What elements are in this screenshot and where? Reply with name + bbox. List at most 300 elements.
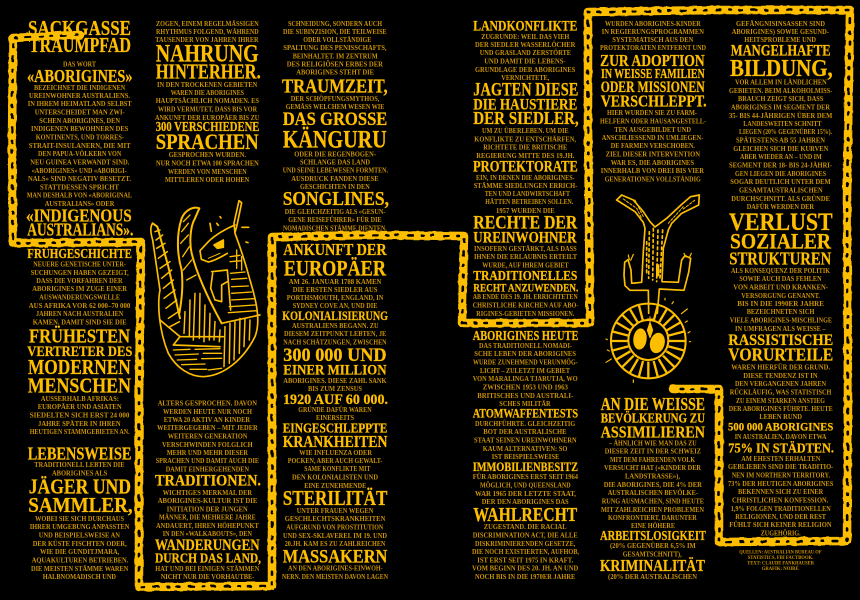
text block: Sprachen verschwinden: ETWA 20 AKTIV AN KINDER (164, 415, 251, 424)
heading: Aborigines: «ABORIGINES» (27, 66, 132, 86)
text: Erlaubnis: WURDE, AUF IHREM GEBIET (482, 260, 569, 270)
text block: Beschneidung: BEINHALTET. IM ZENTRUM (293, 52, 378, 60)
heading: Verlust sozialer Strukturen: SOZIALER (730, 228, 832, 253)
heading: traditionelles Recht anzuwenden: TRADITIONELLES (473, 269, 577, 284)
heading: jagten diese die Haustiere: DIE HAUSTIERE (473, 96, 577, 113)
panel: Bildung (728, 19, 834, 538)
text block: Vorfahren: DASS DIE VORFAHREN DER (36, 276, 123, 285)
heading: an die weisse Bevölkerung: AN DIE WEISSE (601, 394, 705, 414)
text block: ausserhalb Afrikas: EUROPÄER UND ASIATEN (38, 402, 122, 411)
text block: Bezeichnung: KONTINENTS, UND TORRES- (36, 132, 124, 142)
text block: Geschlechtskrankheiten: 20.JH. KAM ES ZU ZAHLREICHEN (285, 539, 386, 548)
text block: Farmhelfer: WAR ES, DIE ABORIGINES (611, 158, 694, 167)
text block: Vorfahren: JAHREN NACH AUSTRALIEN (36, 309, 124, 318)
text block: Missionen: AB ENDE DES 19. JH. ERRICHTETEN (473, 292, 578, 301)
text block: Tendenz: LEBEN RUND (759, 412, 802, 421)
text block: Northern Territory und Religion (728, 454, 834, 538)
text block: Alternativen: IST BEISPIELSWEISE (492, 452, 559, 461)
text block: Influenza und Pocken: DEN KOLONIALISTEN UND (292, 472, 378, 482)
heading: Traumpfad: TRAUMPFAD (29, 33, 131, 57)
text block: Sprachen verschwinden (156, 398, 259, 474)
heading: 300 verschiedene Sprachen (156, 119, 259, 154)
text block: Beschneidung (283, 19, 387, 76)
text: Reiseführer: GENE REISEFÜHRER» FÜR DIE (288, 215, 382, 224)
source credits: QUELLEN: AUSTRALIAN BUREAU OF (739, 550, 822, 556)
heading: Atomwaffentests: ATOMWAFFENTESTS (473, 406, 578, 421)
text: Gesundheitsprobleme: ABORIGINES) SOWIE GESUND- (732, 27, 829, 36)
text block: Schweiz (601, 438, 705, 530)
text block: Regierungsprogramme: IN REGIERUNGSPROGRAMMEN (602, 27, 705, 36)
text block: Alkoholmissbrauch: VOR ALLEM IN LÄNDLICHEN (735, 78, 827, 86)
text block: Queensland: FÜR ABORIGINES ERST SEIT 1964 (473, 472, 578, 481)
heading: Rechte der Ureinwohner (473, 213, 578, 247)
text block: Wasserlöcher: UND GRASLAND ZERSTÖRTE (480, 48, 571, 57)
text block: Farmhelfer: ZIEL DIESER INTERVENTION (606, 150, 701, 158)
heading: Früheste Vertreter: MENSCHEN (28, 374, 131, 398)
text block: Maralinga: WURDE ZUNEHMEND VERUNMÖG- (473, 358, 578, 366)
text block: Alkoholmissbrauch (729, 78, 833, 211)
heading: Nahrung hinterher (156, 41, 261, 83)
text block: Alternativen: BOT DER AUSTRALISCHE (483, 427, 567, 436)
text: Reiseführer: DIE GLEICHZEITIG ALS «GESUN- (285, 207, 386, 216)
text block: Alternativen: DURCHFÜHRTE. GLEICHZEITIG (475, 419, 576, 428)
text block: Konflikte entschärfen: KONFLIKTE ZU ENTSCHÄRFEN, (474, 134, 576, 144)
text block: Initiation: ANDAUERT, IHREN HÖHEPUNKT (156, 521, 259, 530)
text block: 1788: SYDNEY COVE AN, UND DIE (293, 301, 377, 310)
text block: Racial Discrimination Act: VOM BEGINN DES 20. JH. AN UND (472, 564, 578, 572)
text block: Alkoholmissbrauch: 35- BIS 44-JÄHRIGEN ÜBER DEM (729, 111, 832, 120)
text block: trockene Gebiete: IN DEN TROCKENEN GEBIETEN (157, 80, 258, 89)
text block: Regierungsprogramme: WURDEN ABORIGINES-KINDER (605, 19, 701, 28)
text block: Konflikte entschärfen (474, 126, 576, 160)
text block: Lebensraum: DIE MEISTEN STÄMME WAREN (31, 564, 129, 573)
text block: Maralinga (473, 341, 578, 408)
text block: Konflikte entschärfen: RICHTETE DIE BRITISCHE (483, 142, 567, 152)
heading: Wahlrecht: WAHLRECHT (473, 504, 578, 526)
text block: Maralinga: BRITISCHES UND AUSTRALI- (477, 391, 574, 400)
text block: Bezeichnung: INDIGENEN BEWOHNERN DES (31, 124, 128, 133)
text block: Initiation: ABORIGINES-KULTUR IST DIE (158, 496, 257, 505)
text block: Maralinga: DAS TRADITIONELL NOMADI- (479, 341, 572, 350)
heading: Kriminalität: KRIMINALITÄT (600, 556, 706, 575)
text block: Konsequenz der Politik: VON ARBEIT UND KRANKEN- (733, 282, 828, 292)
heading: Jäger und Sammler (28, 475, 133, 517)
icon: figure with circle (606, 195, 699, 382)
text block: trockene Gebiete: WIRD VERMUTET, DASS BIS VOR (158, 104, 258, 114)
text block: Zeitpunkt (283, 321, 387, 346)
heading: an die weisse Bevölkerung: BEVÖLKERUNG ZU (601, 410, 705, 425)
text block: Konsequenz der Politik: ALS KONSEQUENZ DER POLITIK (731, 266, 830, 275)
heading: Frühgeschichte: FRÜHGESCHICHTE (27, 245, 132, 262)
text block: Initiation: IN DEN «WALKABOUTS», DEN (163, 529, 253, 538)
heading: Verlust sozialer Strukturen: VERLUST (729, 209, 833, 236)
text block: Maralinga: SCHE LEBEN DER ABORIGINES (474, 349, 576, 358)
text block: Vorfahren: AUSWANDERUNGSWELLE (39, 292, 120, 302)
text block: Bezeichnung: STATTDESSEN SPRICHT (40, 182, 119, 192)
text block: Tendenz: WAREN HIERFÜR DER GRUND. (731, 362, 830, 372)
text block: Tendenz: DER ABORIGINES FÜHRTE. HEUTE (729, 404, 833, 413)
heading: Wanderungen durch das Land: DURCH DAS LAND, (155, 550, 261, 565)
text block: Schweiz: MIT DEM FAHRENDEN VOLK (610, 455, 695, 464)
text block: Farmhelfer: INNERHALB VON DREI BIS VIER (601, 166, 705, 175)
text block: Sprachen verschwinden: VERSCHWINDEN FOLGLICH (162, 440, 253, 449)
text: traditionell: TRADITIONELL LEBTEN DIE (34, 460, 125, 469)
text block: Farmhelfer: DE FARMEN VERSCHOBEN. (611, 141, 695, 150)
text block: 1788: DIE ERSTEN SIEDLER AUS (293, 285, 377, 294)
heading: 300 verschiedene Sprachen: SPRACHEN (156, 129, 259, 154)
text block: Lebensraum (30, 514, 130, 581)
text block: Regenbogenschlange (283, 150, 388, 191)
text: Erlaubnis (474, 244, 577, 270)
text: das Wort: DAS WORT (63, 60, 96, 68)
text block: Racial Discrimination Act: ZUGESTAND. DIE RACIAL (484, 522, 567, 531)
heading: Massakern: MASSAKERN (283, 547, 388, 567)
text block: Missionen: RIGINES-GEBIETEN MISSIONEN. (476, 309, 574, 318)
text block: ausserhalb Afrikas: JAHRE SPÄTER IN IHREN (38, 419, 121, 428)
text block: noch 100 Sprachen: GESPROCHEN WURDEN. (169, 150, 246, 159)
text block: Alkoholmissbrauch: LIEGEN (20% GEGENÜBER 15%). (739, 127, 832, 136)
heading: Kolonialisierung: KOLONIALISIERUNG (282, 308, 388, 323)
text: Schöpfungsmythos (286, 94, 384, 111)
panel: Landkonflikte (473, 19, 579, 318)
text block: Regierungsprogramme: PROTEKTORATEN ENTFERNT UND (600, 43, 706, 52)
text block: 1788: AM 26. JANUAR 1788 KAMEN (289, 277, 382, 286)
text block: Nomaden: TAUSENDER VON JAHREN IHRER (155, 35, 259, 44)
text block: Sprachen verschwinden: DAMIT EINHERGEHENDEN (166, 464, 250, 474)
text block: Maralinga: SCHES MILITÄR (499, 399, 551, 408)
text block: Vorfahren: NEUERE GENETISCHE UNTER- (33, 260, 126, 268)
text block: Konsequenz der Politik: IN UMFRAGEN ALS WEISSE – (735, 324, 826, 333)
text block: Alkoholmissbrauch: SEGMENT DER 18- BIS 24-JÄHRI- (729, 160, 832, 170)
text block: Alkoholmissbrauch: GLEICHEN SICH DIE KURVEN (733, 144, 829, 153)
text block: noch 100 Sprachen (156, 150, 259, 184)
text block: Racial Discrimination Act: DISCRIMINATION ACT, DIE ALLE (473, 530, 578, 540)
text block: Wasserlöcher: ZUGRUNDE: WEIL DAS VIEH (481, 32, 570, 41)
text block: Alkoholmissbrauch: DAFÜR WERDEN DER (747, 202, 815, 211)
text block: Bezeichnung: SCHEN ABORIGINES, DEN (39, 116, 121, 125)
text block: Siedlungen: STÄMME SIEDLUNGEN ERRICH- (474, 181, 578, 190)
text block: Sprachen verschwinden: MEHR UND MEHR DIESER (167, 448, 249, 457)
text: Zahl sank (283, 376, 387, 393)
text block: Wasserlöcher: GRUNDLAGE DER ABORIGINES (475, 65, 575, 74)
text block: Regenbogenschlange: UND SEINE LEBEWESEN FORMTEN. (283, 166, 388, 174)
text block: Missionen (473, 292, 579, 318)
text block: Schweiz: RUNG AUSMACHEN, SIND HEUTE (602, 496, 704, 506)
text block: Beschneidung: SPALTUNG DES PENISSCHAFTS, (283, 43, 387, 52)
panel: Lebensweise (28, 443, 133, 581)
heading: eingeschleppte Krankheiten (283, 422, 388, 451)
text block: Wasserlöcher: UND DAMIT DIE LEBENS- (484, 56, 566, 66)
text block: noch 100 Sprachen: WERDEN VON MENSCHEN (168, 167, 247, 176)
text block: Vorfahren: KAMEN. DAMIT SIND SIE DIE (33, 318, 127, 326)
heading: Früheste Vertreter: FRÜHESTEN (29, 325, 130, 348)
heading: Das grosse Känguru: DAS GROSSE (283, 109, 387, 130)
text block: Geschlechtskrankheiten: GESCHLECHTSKRANKHEITEN (285, 514, 386, 523)
text block: Bezeichnung: BEZEICHNET DIE INDIGENEN (34, 83, 126, 92)
panel: Sprachen (155, 19, 261, 184)
text block: Konflikte entschärfen: UM ZU ÜBERLEBEN. UM DIE (482, 126, 569, 135)
panel: Assimilieren (600, 394, 706, 581)
text block: Racial Discrimination Act (472, 522, 579, 581)
text: Gesundheitsprobleme (732, 19, 829, 44)
text block: Sprachen verschwinden: WEITEREN GENERATION (168, 432, 248, 440)
text block: Vorfahren: SUCHUNGEN HABEN GEZEIGT, (31, 268, 129, 277)
text block: Beschneidung: ABORIGINES STEHT DIE (296, 68, 374, 76)
text block: Sprachen verschwinden: WEITERGEGEBEN – MIT JEDER (157, 423, 258, 432)
text block: Vorhautbeschneidung: NICHT NUR DIE VORHAUTBE- (161, 572, 255, 581)
text block: Sprachen verschwinden: WERDEN HEUTE NUR NOCH (163, 407, 252, 416)
text block: Northern Territory und Religion: RELIGIONEN, UND DER REST (735, 512, 826, 521)
panel: Frühgeschichte (27, 245, 132, 436)
text block: ausserhalb Afrikas: SIEDELTEN SICH ERST 24 000 (30, 410, 130, 420)
text block: noch 100 Sprachen: NUR NOCH ETWA 100 SPRACHEN (156, 158, 259, 168)
text block: Tendenz: DEN VERGANGENEN JAHREN (735, 379, 827, 388)
text block: Zeitpunkt: AUSTRALIENS BEGANN. ZU (292, 321, 379, 330)
text: Einwohner: NERN. DEN MEISTEN DAVON LAGEN (282, 572, 389, 581)
text block: Lebensraum: HALBNOMADISCH UND (43, 572, 116, 581)
heading: Früheste Vertreter (27, 325, 132, 398)
heading: Sterilität: STERILITÄT (283, 486, 387, 510)
text block: Regierungsprogramme (600, 19, 706, 52)
text block: noch 100 Sprachen: MITTLEREN ODER HOHEN (165, 175, 250, 184)
text block: Initiation: WICHTIGES MERKMAL DER (163, 488, 253, 497)
text block: Racial Discrimination Act: IST ERST SEIT 1975 IN KRAFT. (477, 556, 573, 564)
text block: Lebensraum: WIE DIE GUNDITJMARA, (40, 547, 119, 556)
text block: Farmhelfer: HELFERN ODER HAUSANGESTELL- (600, 116, 706, 126)
source credits: TEXT: CLAUDE FANKHAUSER (747, 562, 814, 566)
text block: Maralinga: VON MARALINGA TJARUTJA, WO (473, 374, 578, 383)
panel: Adoption (600, 19, 707, 183)
text: 20 Prozent: GESAMTSCHNITT), (623, 550, 682, 558)
heading: Traumzeit: TRAUMZEIT, (282, 76, 388, 97)
text block: Queensland: MÖGLICH, UND QUEENSLAND (480, 480, 571, 490)
heading: Indigenous Australians (26, 206, 133, 240)
panel: Traditionen (155, 398, 261, 581)
text block: Farmhelfer: HIER WURDEN SIE ZU FARM- (607, 108, 697, 117)
text block: Bezeichnung: AUSTRALIANS» ODER (45, 199, 115, 208)
heading: zur Adoption: ODER MISSIONEN (601, 79, 705, 96)
text block: Queensland (473, 472, 578, 506)
text block: trockene Gebiete (155, 80, 260, 122)
text: Zahl sank: ABORIGINES. DIESE ZAHL SANK (283, 376, 387, 385)
text block: Alternativen (474, 419, 577, 461)
text block: Geschlechtskrankheiten: UND SEX-SKLAVEREI. IM 19. UND (283, 531, 387, 540)
text block: Maralinga: ZWISCHEN 1953 UND 1963 (483, 382, 568, 392)
heading: mangelhafte Bildung (730, 43, 833, 82)
text block: Farmhelfer: ANSCHLIESSEND IN UMLIEGEN- (602, 133, 704, 142)
text block: Lebensraum: IHRER UMGEBUNG ANPASSTEN (30, 522, 130, 531)
text block: Geschlechtskrankheiten: AUFGRUND VON PROSTITUTION (286, 522, 384, 532)
text block: Bezeichnung: NEU GUINEA VERWANDT SIND. (30, 157, 129, 166)
text block: Queensland: WAR 1965 DER LETZTE STAAT, (475, 489, 576, 498)
text block: Alternativen: STAAT SEINEN UREINWOHNERN (474, 436, 577, 444)
text: Gründe: GRÜNDE DAFÜR WAREN (298, 405, 372, 414)
text block: Influenza und Pocken: POCKEN, ABER AUCH GEWALT- (288, 456, 383, 465)
text block: Nomaden: RHYTHMUS FOLGEND, WÄHREND (156, 27, 259, 36)
text block: Maralinga: LICHT – ZULETZT IM GEBIET (480, 366, 570, 375)
text block: Racial Discrimination Act: DISKRIMINIERENDEN GESETZE, (475, 539, 575, 548)
text block: Konflikte entschärfen: REGIERUNG MITTE DES 19.JH. (476, 151, 574, 160)
text block: Queensland: DER DEN ABORIGINES DAS (482, 497, 569, 506)
text: Reiseführer (283, 207, 387, 232)
text block: Geschlechtskrankheiten: UNTER FRAUEN WEGEN (297, 506, 374, 515)
text block: Alkoholmissbrauch: ABORIGINES IM SEGMENT DER (731, 102, 831, 112)
text block: Northern Territory und Religion: 73% DER HEUTIGEN ABORIGINES (728, 479, 833, 488)
text block: Siedlungen: EIN, IN DENEN DIE ABORIGINES- (476, 173, 575, 182)
heading: Aborigines heute: ABORIGINES HEUTE (473, 329, 578, 344)
text block: Bezeichnung: UREINWOHNER AUSTRALIENS. (29, 91, 130, 100)
text: Zahl sank: BIS ZUM ZENSUS (308, 384, 362, 393)
heading: traditionelles Recht anzuwenden: RECHT ANZUWENDEN. (473, 281, 578, 295)
text block: Siedlungen: HÄTTEN BETREIBEN SOLLEN. (485, 197, 573, 206)
heading: traditionelles Recht anzuwenden (473, 269, 578, 295)
text block: Konsequenz der Politik: BEZEICHNETEN SICH (747, 307, 815, 316)
text block: Influenza und Pocken: SAME KONFLIKTE MIT (304, 464, 370, 473)
heading: Songlines: SONGLINES, (283, 189, 389, 210)
heading: Wanderungen durch das Land: WANDERUNGEN (155, 537, 260, 554)
text block: ausserhalb Afrikas (30, 394, 130, 436)
text block: Alkoholmissbrauch: GEN LIEGEN DIE ABORIGINES (735, 169, 826, 178)
heading: Arbeitslosigkeit: ARBEITSLOSIGKEIT (600, 528, 706, 543)
heading: 300 000 und einer Million (283, 346, 387, 378)
text: 20 Prozent (610, 541, 696, 558)
text: Gründe: EINERSEITS (316, 413, 354, 422)
text block: 1788: PORTHSMOUTH, ENGLAND, IN (287, 293, 384, 302)
text block: Bezeichnung: NALS» SIND NEGATIV BESETZT. (28, 174, 131, 183)
text block: Bezeichnung: DEN PAPUA-VÖLKERN VON (38, 149, 122, 158)
heading: jagten diese die Haustiere (473, 81, 579, 128)
text block: Tendenz: RÜCKLÄUFIG, WAS STATISTISCH (730, 388, 832, 396)
heading: zur Adoption: ZUR ADOPTION (600, 51, 705, 70)
text block: Influenza und Pocken (288, 448, 383, 490)
heading: Früheste Vertreter: VERTRETER DES (27, 344, 132, 360)
heading: 300 000 und einer Million: 300 000 UND (283, 346, 387, 366)
heading: Rechte der Ureinwohner: UREINWOHNER (473, 230, 577, 247)
heading: jagten diese die Haustiere: DER SIEDLER, (473, 108, 579, 128)
text block: trockene Gebiete: HAUPTSÄCHLICH NOMADEN. ES (156, 96, 259, 105)
heading: rassistische Vorurteile: RASSISTISCHE (728, 332, 833, 349)
text block: Regenbogenschlange: GESCHICHTEN IN DEN (300, 182, 370, 191)
text block: Northern Territory und Religion: 1,9% FOLGEN TRADITIONELLEN (731, 504, 831, 513)
heading: Nahrung hinterher: NAHRUNG (156, 41, 259, 68)
text: Schöpfungsmythos: GEMÄSS WELCHEM WESEN WIE (286, 102, 384, 111)
text block: Schweiz: KONFRONTIERT, DARUNTER (608, 513, 697, 522)
text block: Schweiz: DIE ABORIGINES, DIE 4% DER (604, 480, 703, 489)
text block: Bezeichnung: UNTERSCHEIDET MAN ZWI- (35, 108, 125, 116)
text block: Vorfahren: AUS AFRIKA VOR 62 000–70 000 (29, 301, 131, 310)
heading: Landkonflikte: LANDKONFLIKTE (473, 19, 577, 35)
text block: Alkoholmissbrauch: GESAMTAUSTRALISCHEN (739, 186, 823, 194)
text block: Konsequenz der Politik: BIS IN DIE 1990ER JAHRE (737, 299, 824, 308)
heading: Sackgasse: SACKGASSE (28, 16, 131, 40)
heading: Protektorate: PROTEKTORATE (473, 158, 578, 175)
text block: Alkoholmissbrauch: LANDESWEITEN SCHNITT (743, 119, 822, 128)
text block: Alkoholmissbrauch: DURCHSCHNITT. ALS GRÜNDE (731, 194, 830, 203)
heading: Früheste Vertreter: MODERNEN (28, 355, 131, 379)
heading: 300 verschiedene Sprachen: 300 VERSCHIEDENE (156, 119, 259, 134)
heading: Verlust sozialer Strukturen (729, 209, 833, 269)
text block: Missionen: CHRISTLICHE KIRCHEN AUF ABO- (473, 300, 579, 310)
text block: Schweiz: MIT ZAHLREICHEN PROBLEMEN (601, 505, 705, 514)
text block: Nomaden (155, 19, 259, 44)
text block: Zeitpunkt: NACH SCHÄTZUNGEN, ZWISCHEN (283, 338, 387, 346)
text block: ausserhalb Afrikas: HEUTIGEN STAMMGEBIETEN AN. (30, 427, 130, 436)
heading: Wanderungen durch das Land (155, 537, 261, 565)
text block: Siedlungen (474, 173, 578, 215)
text: Erlaubnis: INSOFERN GESTÄRKT, ALS DASS (474, 244, 577, 253)
text block: Beschneidung: DIE SUBINZISION, DIE TEILWEISE (283, 27, 387, 36)
text block: trockene Gebiete: ANKUNFT DER EUROPÄER BIS ZU (155, 113, 260, 122)
text block: Geschlechtskrankheiten (283, 506, 387, 548)
text block: Northern Territory und Religion: AM EHESTEN ERHALTEN (741, 454, 821, 463)
text block: Konsequenz der Politik: SOWIE AUCH DAS FEHLEN (739, 274, 822, 283)
text block: trockene Gebiete: WAREN DIE ABORIGINES (171, 88, 244, 97)
text block: Schweiz: EINE HÖHERE (631, 521, 675, 530)
heading: an die weisse Bevölkerung (601, 394, 706, 441)
heading: Verlust sozialer Strukturen: STRUKTUREN (729, 249, 831, 269)
text block: Initiation: MÄNNER, DIE MEHRERE JAHRE (159, 512, 256, 522)
heading: rassistische Vorurteile (728, 332, 833, 365)
text block: Alkoholmissbrauch: SOGAR DEUTLICH UNTER DEM (730, 177, 831, 186)
heading: Indigenous Australians: AUSTRALIANS». (27, 220, 133, 240)
text block: Schweiz: VERSUCHT HAT («KINDER DER (604, 463, 702, 472)
text block: Vorhautbeschneidung: HAT UND BEI EINIGEN STÄMMEN (155, 564, 260, 573)
text: Schöpfungsmythos: DER SCHÖPFUNGSMYTHOS, (291, 94, 380, 103)
text block: Nomaden: ZOGEN, EINEM REGELMÄSSIGEN (156, 19, 259, 28)
text block: Siedlungen: TEN UND LANDWIRTSCHAFT (485, 189, 570, 198)
text block: Konsequenz der Politik: VIELE ABORIGINES-MISCHLINGE (730, 316, 832, 324)
text block: Bezeichnung (27, 83, 132, 208)
text block: Schweiz: LANDSTRASSE»), (625, 472, 680, 480)
text block: Regenbogenschlange: ODER DIE REGENBOGEN- (294, 150, 376, 158)
text: traditionell (34, 460, 125, 478)
text block: Vorhautbeschneidung (155, 564, 260, 581)
heading: zur Adoption (600, 51, 707, 111)
heading: rassistische Vorurteile: VORURTEILE (728, 345, 833, 365)
text block: Konsequenz der Politik (730, 266, 832, 333)
text block: Sprachen verschwinden: SPRACHEN UND DAMIT AUCH DIE (156, 456, 259, 465)
heading: eingeschleppte Krankheiten: EINGESCHLEPPTE (283, 422, 387, 437)
text block: Northern Territory und Religion: ZUGEHÖRIG. (761, 528, 801, 538)
text block: Lebensraum: AQUAKULTUREN BETRIEBEN. (32, 556, 129, 564)
text block: Bezeichnung: STRAIT-INSULANERN, DIE MIT (29, 141, 131, 150)
text block: Regenbogenschlange: SCHLANGE DAS LAND (300, 158, 370, 166)
text block: Regenbogenschlange: AUSDRUCK FANDEN DIESE (291, 174, 379, 183)
text block: Influenza und Pocken: EINE ZUNEHMENDE (304, 481, 366, 490)
panel: Sackgasse Traumpfad (26, 16, 133, 240)
text block: Initiation (156, 488, 259, 538)
heading: 300 000 und einer Million: EINER MILLION (283, 362, 387, 378)
text block: Vorfahren: ABORIGINES IM ZUGE EINER (32, 284, 128, 293)
text block: Bezeichnung: «ABORIGINES» UND «ABORIGI- (32, 166, 127, 175)
text block: Alkoholmissbrauch: BRAUCH ZEIGT SICH, DASS (738, 94, 823, 103)
panel: Traumzeit (282, 19, 389, 232)
text block: Initiation: INITIATION DER JUNGEN (167, 504, 248, 514)
text block: Wasserlöcher: DER SIEDLER WASSERLÖCHER (475, 40, 576, 49)
heading: Ankunft der Europäer: ANKUNFT DER (283, 240, 387, 259)
heading: Indigenous Australians: «INDIGENOUS (26, 206, 132, 226)
heading: Rechte der Ureinwohner: RECHTE DER (473, 213, 578, 234)
text block: Northern Territory und Religion: NEN IM NORTHERN TERRITORY. (732, 470, 830, 480)
text block: Racial Discrimination Act: NOCH BIS IN DIE 1970ER JAHRE (475, 572, 575, 581)
text block: Bezeichnung: IN IHREM HEIMATLAND SELBST (28, 99, 132, 108)
text: in Australien: IN AUSTRALIEN, DAVON ETWA (735, 432, 827, 441)
text block: Alkoholmissbrauch: GEBIETEN. BEIM ALKOHOLMISS- (729, 86, 833, 95)
text block: Bezeichnung: MAN DESHALB VON «ABORIGINAL (27, 190, 132, 200)
heading: eingeschleppte Krankheiten: KRANKHEITEN (283, 432, 388, 451)
text block: Lebensraum: DER KÜSTE FISCHTEN ODER, (33, 539, 127, 548)
text block: Vorfahren (29, 260, 131, 326)
